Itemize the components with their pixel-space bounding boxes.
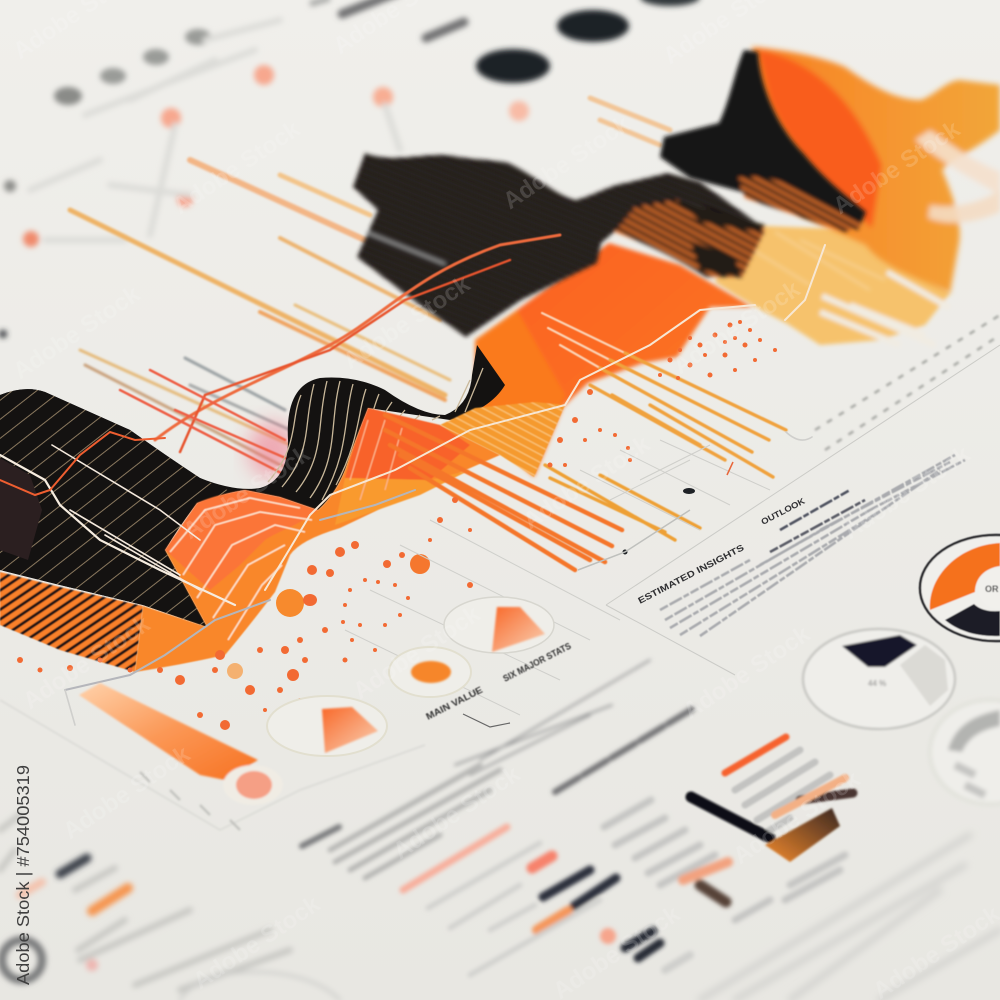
heading bar <box>555 708 694 792</box>
panel: pie chart orange and black <box>920 535 1000 641</box>
faint repeated watermark: Adobe Stock <box>678 620 816 725</box>
chart: amber foothill with pale bars <box>715 225 950 345</box>
body copy <box>330 765 500 878</box>
chart: orange stripes under black wave <box>0 572 143 672</box>
marker dot <box>683 488 695 494</box>
faint repeated watermark: Adobe Stock <box>498 110 636 215</box>
panel: bar list lower right <box>691 737 853 862</box>
grey dial <box>2 940 42 980</box>
panel: small bar and annotation grid <box>345 315 1000 715</box>
pale orange bar <box>775 778 845 815</box>
panel: report box with heading and body copy <box>606 345 1000 675</box>
marker dot <box>622 550 628 554</box>
chart: orange and amber bars <box>385 313 786 570</box>
brown gradient block <box>765 808 840 862</box>
faint repeated watermark: Adobe Stock <box>348 600 486 705</box>
panel: icon cards in the lower centre <box>267 597 573 756</box>
panel: gauge bottom right <box>930 700 1000 804</box>
faint repeated watermark: Adobe Stock <box>828 115 966 220</box>
faint repeated watermark: Adobe Stock <box>8 280 146 385</box>
pie label: OR <box>985 584 999 594</box>
grey list lower <box>604 800 715 885</box>
salmon bar <box>403 827 507 890</box>
card caption: MAIN VALUE <box>424 685 484 722</box>
body text <box>660 455 965 636</box>
heading: ESTIMATED INSIGHTS <box>636 542 746 606</box>
faint repeated watermark: Adobe Stock <box>518 430 656 535</box>
panel: bottom right text lines <box>700 835 1000 1000</box>
chart: orange central ridge <box>475 243 752 477</box>
label <box>302 827 339 846</box>
faint repeated watermark: Adobe Stock <box>18 610 156 715</box>
grey rows <box>0 815 290 990</box>
grey bars <box>428 843 600 975</box>
panel: lower centre mini bars <box>403 827 690 975</box>
panel: top faded dashboard markers <box>0 0 700 338</box>
panel: lower list and dark tail <box>604 800 845 920</box>
dark chip <box>625 931 660 958</box>
tiny axis labels <box>815 315 1000 450</box>
panel: bottom left legend <box>0 815 340 1000</box>
annotation ticks <box>345 440 770 715</box>
panel: pie chart black and grey <box>803 629 955 729</box>
chart: orange splatter dots <box>17 320 777 730</box>
lines: pale trend lines across the chart <box>0 245 825 725</box>
faint repeated watermark: Adobe Stock <box>338 270 476 375</box>
orange-dark tail <box>683 862 728 880</box>
dark stripe <box>691 797 770 838</box>
coral dot <box>600 928 616 944</box>
small arrow <box>463 714 510 727</box>
chart: amber wedge under central ridge <box>440 402 565 477</box>
panel: upper grid lines behind the wave <box>70 98 670 470</box>
faint repeated watermark: Adobe Stock <box>168 115 306 220</box>
faint repeated watermark: Adobe Stock <box>58 740 196 845</box>
faint repeated watermark: Adobe Stock <box>728 765 866 870</box>
orange chip <box>532 856 552 868</box>
chart: dark peak top right <box>660 50 866 232</box>
panel outline <box>606 345 1000 675</box>
card: triangle lower <box>267 696 387 756</box>
chart: red spray behind left wave <box>248 422 296 478</box>
stock watermark side label: Adobe Stock | #754005319 <box>13 765 33 985</box>
chart: black wave left <box>0 345 505 627</box>
faint repeated watermark: Adobe Stock <box>388 760 526 865</box>
card caption: SIX MAJOR STATS <box>501 641 573 684</box>
lines: red connecting traces <box>120 235 560 475</box>
faint repeated watermark: Adobe Stock <box>668 275 806 380</box>
orange bar <box>537 911 568 930</box>
pie label: 44 % <box>868 679 886 688</box>
red tick <box>727 462 733 475</box>
top dark lozenges <box>310 0 700 83</box>
faint repeated watermark: Adobe Stock <box>188 890 326 995</box>
dark chip <box>60 858 87 874</box>
orange highlight <box>725 737 786 773</box>
panel: lower centre summary text <box>302 660 694 878</box>
faint repeated watermark: Adobe Stock <box>838 440 976 545</box>
subheading: OUTLOOK <box>759 495 807 527</box>
chart: dark central ridge <box>353 153 765 337</box>
baseline <box>578 510 690 570</box>
chart: layered orange contour <box>135 408 500 672</box>
card: circle <box>389 647 471 697</box>
orange chip <box>92 888 128 911</box>
chart: orange peak top right <box>752 47 1000 293</box>
card: triangle large <box>444 597 554 653</box>
pink marks <box>20 882 42 895</box>
small grey and coral markers <box>0 20 529 338</box>
faint repeated watermark: Adobe Stock <box>178 440 316 545</box>
chart: orange gradient ribbon lower left <box>0 683 425 830</box>
dark bars <box>543 870 616 906</box>
grey list <box>735 750 830 832</box>
dark tail <box>800 793 853 800</box>
